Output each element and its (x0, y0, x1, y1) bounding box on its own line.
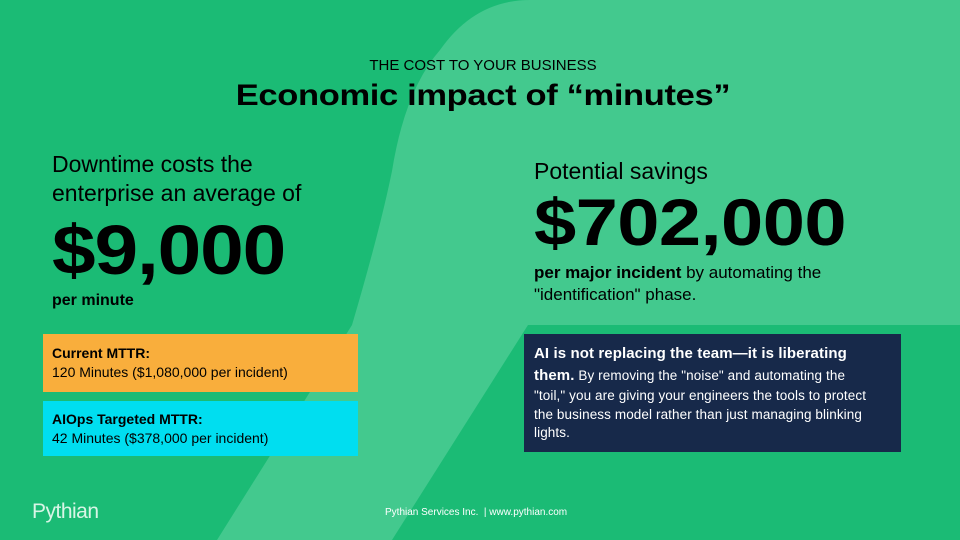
big number: $9,000 (52, 211, 285, 289)
card: AIOps MTTR (43, 401, 358, 456)
right stat block (534, 158, 846, 304)
big number: $702,000 (534, 185, 846, 259)
logo: Pythian (32, 500, 99, 523)
description: per major incident by automating the "identification" phase. (534, 263, 821, 304)
card: AIOps MTTR: AIOps Targeted MTTR: (52, 411, 203, 427)
title: Economic impact of “minutes” (236, 79, 730, 112)
unit: per minute (52, 292, 134, 309)
card: AIOps MTTR: 42 Minutes ($378,000 per incident) (52, 430, 268, 446)
eyebrow heading: THE COST TO YOUR BUSINESS (369, 57, 597, 74)
lead text: Downtime costs the enterprise an average of (52, 151, 301, 206)
left stat block (52, 151, 302, 309)
footer: Pythian Services Inc. | www.pythian.com (385, 507, 567, 518)
lead text: Potential savings (534, 158, 708, 184)
callout: AI liberating: AI is not replacing the team—it is liberating them. By removing the "noise" and automating the "toil," you are giving your engineers the tools to protect the business model rather than just managing blinking lights. (534, 345, 866, 440)
card: current MTTR: Current MTTR: (52, 345, 150, 361)
card: current MTTR: 120 Minutes ($1,080,000 per incident) (52, 364, 288, 380)
card: current MTTR (43, 334, 358, 392)
